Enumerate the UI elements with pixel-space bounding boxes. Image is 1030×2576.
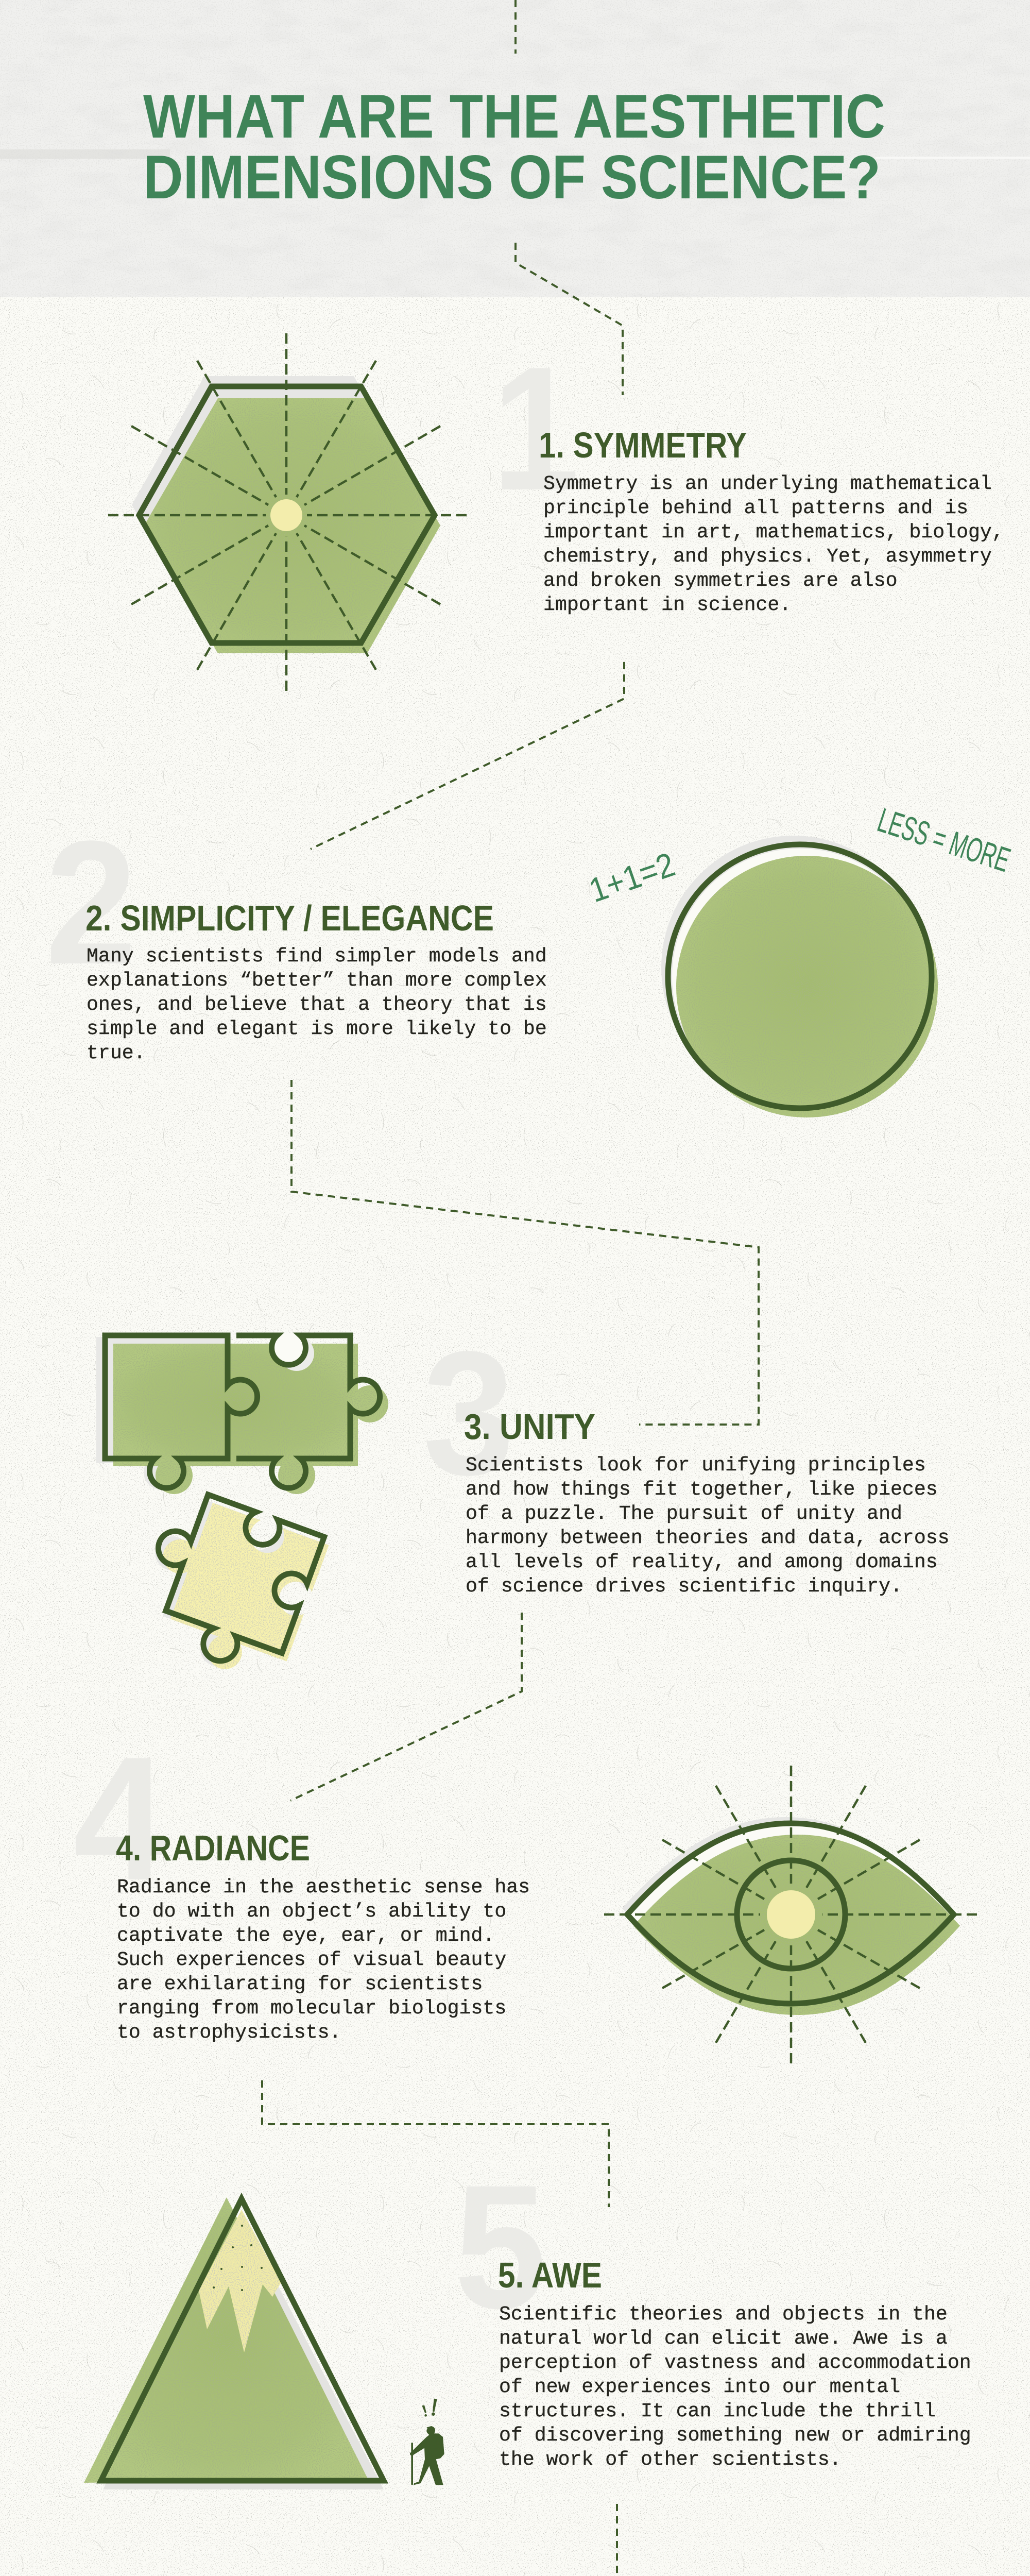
panel: 1 symmetry [108, 330, 1004, 691]
body text: and how things fit together, like pieces [466, 1479, 938, 1501]
dashed connector: awe to wonder [209, 2504, 617, 2576]
body text: natural world can elicit awe. Awe is a [499, 2328, 948, 2350]
dashed connector: symmetry to simplicity [311, 662, 624, 849]
body text: are exhilarating for scientists [117, 1973, 483, 1995]
body text: Scientific theories and objects in the [499, 2303, 948, 2326]
body text: of science drives scientific inquiry. [466, 1575, 902, 1598]
body text: Such experiences of visual beauty [117, 1949, 506, 1971]
body text: of discovering something new or admiring [499, 2425, 971, 2447]
body text: perception of vastness and accommodation [499, 2352, 971, 2374]
heading: 4. RADIANCE [116, 1828, 310, 1868]
big numeral 4: 4 [73, 1720, 168, 1917]
heading: 3. UNITY [464, 1406, 595, 1447]
body text: ranging from molecular biologists [117, 1997, 506, 2020]
panel: 5 awe [84, 2148, 971, 2489]
body text: true. [87, 1042, 146, 1064]
body text: of new experiences into our mental [499, 2376, 900, 2398]
body text: captivate the eye, ear, or mind. [117, 1925, 494, 1947]
title [143, 82, 885, 212]
body text: chemistry, and physics. Yet, asymmetry [543, 546, 992, 568]
icon: hiker [410, 2399, 444, 2485]
dashed connector: title to symmetry [516, 243, 623, 395]
body text: and broken symmetries are also [543, 570, 897, 592]
body text: principle behind all patterns and is [543, 497, 968, 519]
body text: structures. It can include the thrill [499, 2400, 936, 2422]
body text: Many scientists find simpler models and [87, 945, 547, 968]
body text: ones, and believe that a theory that is [87, 994, 547, 1016]
dashed connector: simplicity to unity [291, 1080, 759, 1425]
icon: hexagon with symmetry lines [108, 333, 467, 691]
big numeral 2: 2 [45, 804, 137, 1001]
label: 1+1=2: 1+1=2 [584, 845, 679, 909]
icon: circle [661, 836, 938, 1117]
body text: the work of other scientists. [499, 2449, 842, 2471]
body text: of a puzzle. The pursuit of unity and [466, 1503, 902, 1525]
body text: Symmetry is an underlying mathematical [543, 473, 992, 495]
big numeral 1: 1 [492, 330, 579, 527]
body text: explanations “better” than more complex [87, 970, 547, 992]
panel: 2 simplicity [45, 801, 1015, 1117]
body text: Radiance in the aesthetic sense has [117, 1876, 530, 1899]
body text: important in art, mathematics, biology, [543, 521, 1004, 544]
body text: Scientists look for unifying principles [466, 1454, 926, 1477]
panel: 3 unity [96, 1315, 950, 1689]
dashed connector: unity to radiance [290, 1613, 522, 1801]
heading: 5. AWE [498, 2255, 602, 2295]
big numeral 3: 3 [423, 1315, 514, 1512]
panel: 4 radiance [73, 1720, 977, 2063]
body text: simple and elegant is more likely to be [87, 1018, 547, 1040]
heading: 1. SYMMETRY [539, 425, 747, 465]
body text: all levels of reality, and among domains [466, 1551, 938, 1573]
icon: mountain [84, 2197, 384, 2489]
title: DIMENSIONS OF SCIENCE? [143, 143, 881, 212]
dashed connector: top [514, 0, 517, 54]
heading: 2. SIMPLICITY / ELEGANCE [85, 898, 494, 938]
body text: harmony between theories and data, across [466, 1527, 950, 1549]
body text: to astrophysicists. [117, 2022, 341, 2044]
big numeral 5: 5 [454, 2148, 547, 2345]
dashed connector: radiance to awe [262, 2080, 609, 2207]
icon: puzzle pieces [96, 1333, 388, 1689]
body text: important in science. [543, 594, 791, 616]
title: WHAT ARE THE AESTHETIC [143, 82, 885, 151]
body text: to do with an object’s ability to [117, 1901, 506, 1923]
icon: eye [604, 1766, 977, 2063]
panel: header band [0, 0, 1030, 297]
